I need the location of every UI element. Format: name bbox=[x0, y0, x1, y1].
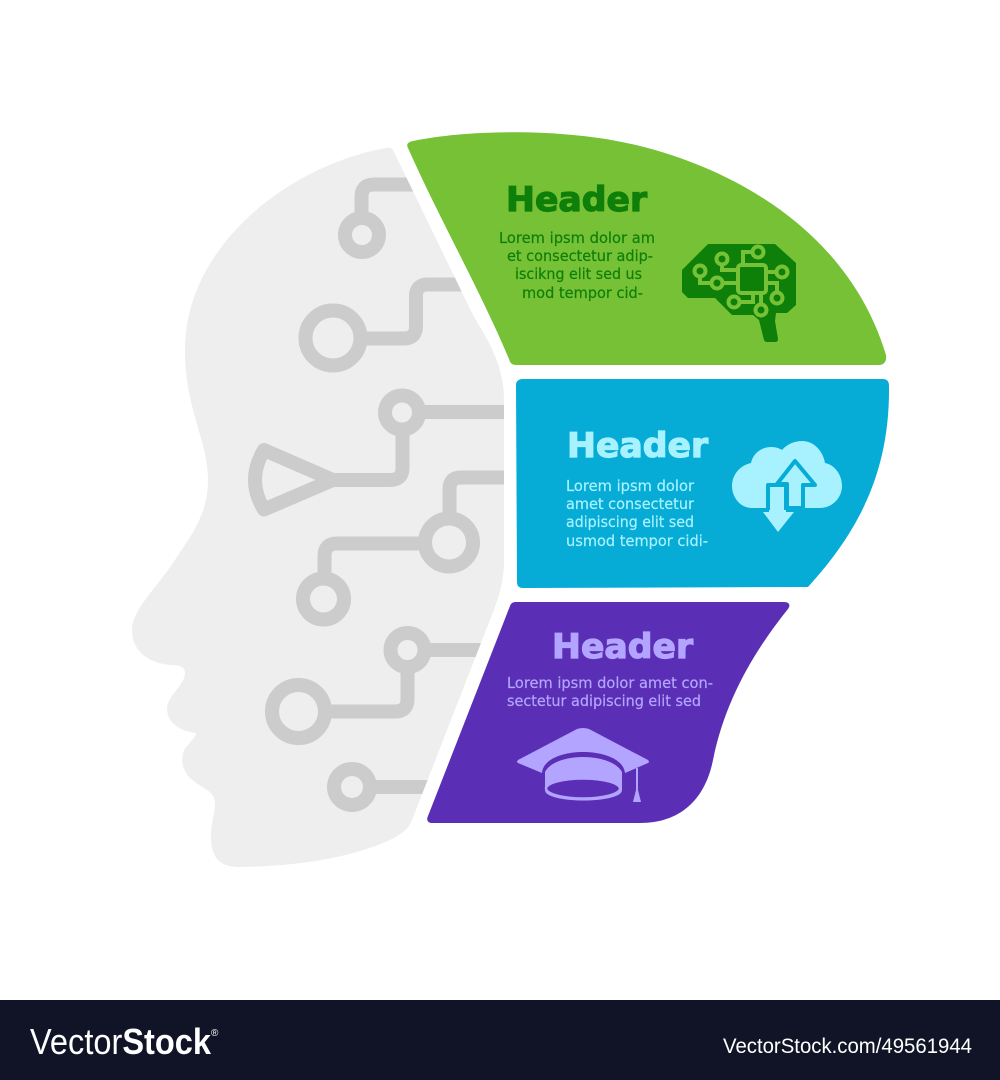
heading: Header bbox=[567, 426, 708, 466]
body text: et consectetur adip- bbox=[507, 247, 653, 265]
body text: amet consectetur bbox=[566, 495, 695, 513]
body text: Lorem ipsm dolor am bbox=[499, 229, 655, 247]
body text bbox=[566, 477, 708, 550]
body text bbox=[499, 229, 655, 302]
heading: Header bbox=[506, 180, 647, 220]
head silhouette bbox=[132, 148, 504, 867]
body text bbox=[507, 674, 713, 710]
logo wordmark: VectorStock bbox=[30, 1021, 212, 1062]
panel: purple bottom section bbox=[427, 602, 789, 823]
purple shape bbox=[427, 602, 789, 823]
icon: cloud with up and down arrows bbox=[732, 441, 842, 532]
icon: circuit brain bbox=[682, 244, 796, 342]
circuit traces bbox=[255, 184, 510, 805]
blue shape bbox=[516, 379, 889, 588]
footer bar bbox=[0, 1000, 1000, 1080]
green shape bbox=[407, 132, 886, 365]
body text: sectetur adipiscing elit sed bbox=[507, 692, 701, 710]
body text: Lorem ipsm dolor amet con- bbox=[507, 674, 713, 692]
panel: green top section bbox=[407, 132, 886, 365]
body text: mod tempor cid- bbox=[522, 284, 643, 302]
body text: Lorem ipsm dolor bbox=[566, 477, 695, 495]
registered mark: ® bbox=[211, 1028, 219, 1039]
icon: graduation cap bbox=[517, 728, 649, 802]
image id: VectorStock.com/49561944 bbox=[723, 1035, 972, 1058]
heading: Header bbox=[552, 627, 693, 667]
panel: blue middle section bbox=[516, 379, 889, 588]
body text: usmod tempor cidi- bbox=[566, 532, 708, 550]
panel: gray head profile with circuit traces bbox=[132, 148, 510, 867]
body text: adipiscing elit sed bbox=[566, 513, 694, 531]
body text: iscikng elit sed us bbox=[515, 265, 642, 283]
